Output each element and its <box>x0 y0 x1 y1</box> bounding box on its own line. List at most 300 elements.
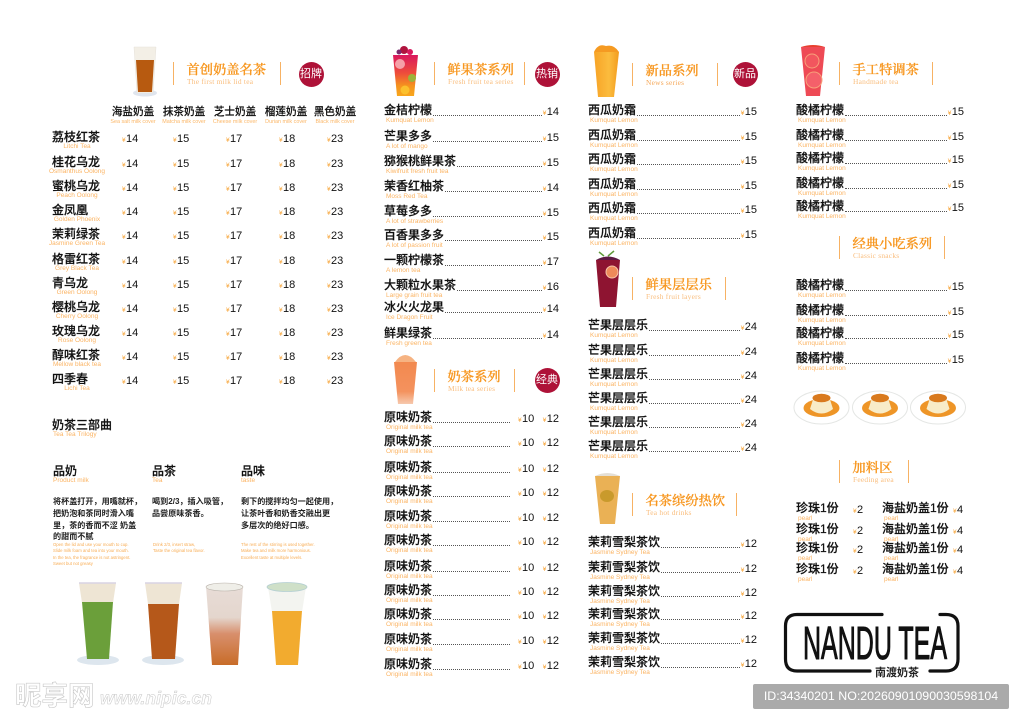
menu row 3: 西瓜奶霜: Kumquat Lemon <box>590 166 638 172</box>
menu row 11: 原味奶茶: ¥10 <box>518 660 534 672</box>
table row: 樱桃乌龙: ¥17 <box>226 302 242 314</box>
heading: first milk lid tea <box>173 62 281 85</box>
menu row 4: 酸橘柠檬: Kumquat Lemon <box>798 364 846 372</box>
table row: 醇味红茶: Mellow black tea <box>53 361 101 368</box>
menu row 5: 茉莉雪梨茶饮: ¥12 <box>741 634 757 646</box>
menu row 1: 原味奶茶: ¥10 <box>518 412 534 424</box>
menu row 2: 西瓜奶霜: 西瓜奶霜 <box>588 128 636 142</box>
table row: 桂花乌龙: Osmanthus Oolong <box>49 168 105 175</box>
menu row 4: 酸橘柠檬 <box>796 176 964 199</box>
menu row 1: 茉莉雪梨茶饮: Jasmine Sydney Tea <box>590 548 650 556</box>
menu row: 芒果多多: ¥15 <box>543 132 559 144</box>
text block: tea instructions: 品尝原味茶香。 <box>152 509 209 518</box>
menu row 10: 原味奶茶: Original milk tea <box>386 646 433 652</box>
menu row: 冰火火龙果: Ice Dragon Fruit <box>386 314 433 320</box>
menu row 1: 酸橘柠檬: 酸橘柠檬 <box>796 103 844 117</box>
table row: 四季春: ¥23 <box>327 374 343 386</box>
menu row 11: 原味奶茶: 原味奶茶 <box>384 657 432 671</box>
menu row 1: 芒果层层乐: 芒果层层乐 <box>588 318 648 332</box>
badge: classic <box>534 368 560 392</box>
table row: 醇味红茶: ¥23 <box>327 350 343 362</box>
heading: tea hot drinks: 名茶缤纷热饮 <box>646 492 725 508</box>
text block: tea english: Taste the original tea flavor. <box>153 548 205 553</box>
menu row 10: 原味奶茶: ¥10 <box>518 634 534 646</box>
menu row: 草莓多多: A lot of strawberries <box>386 218 443 224</box>
menu row 2: 原味奶茶: ¥12 <box>543 436 559 448</box>
menu row 2: 酸橘柠檬: 酸橘柠檬 <box>796 303 844 317</box>
menu row 5: 芒果层层乐: Kumquat Lemon <box>590 428 638 436</box>
menu row 2: 酸橘柠檬: Kumquat Lemon <box>798 316 846 324</box>
badge: new <box>732 62 758 86</box>
text block: tea english: Drink 2/3, insert straw, <box>153 542 195 547</box>
table row: 桂花乌龙 <box>49 155 343 175</box>
column header: durian <box>265 106 307 124</box>
menu row: 草莓多多: ¥15 <box>543 206 559 218</box>
topping row 3: pearl <box>798 554 812 562</box>
icon: black tea cup <box>142 582 184 665</box>
table row: 茉莉绿茶: ¥14 <box>122 230 138 242</box>
logo: NANDU TEA: 南渡奶茶 <box>875 665 919 679</box>
heading: fresh fruit layers <box>632 277 726 300</box>
heading: new series <box>632 63 718 86</box>
table row: 金凤凰: ¥14 <box>122 206 138 218</box>
heading: feeding area <box>839 460 909 483</box>
heading: fresh fruit tea <box>434 62 525 85</box>
table row: 青乌龙: ¥18 <box>279 278 295 290</box>
topping row 4: ¥4 <box>953 564 963 576</box>
heading: handmade tea <box>839 62 933 85</box>
menu row 5: 西瓜奶霜: ¥15 <box>741 204 757 216</box>
menu row: 大颗粒水果茶: Large grain fruit tea <box>386 292 442 298</box>
table row: 蜜桃乌龙: 蜜桃乌龙 <box>52 179 100 193</box>
table row: 茉莉绿茶: ¥15 <box>173 230 189 242</box>
topping row 2: 珍珠1份 <box>796 522 839 536</box>
menu row: 猕猴桃鲜果茶 <box>384 154 559 174</box>
menu row 9: 原味奶茶: ¥12 <box>543 610 559 622</box>
table row: 茉莉绿茶: ¥17 <box>226 230 242 242</box>
text block: milk instructions: 里，茶的香而不涩 奶盖 <box>53 521 136 530</box>
watermark: nipic: www.nipic.cn <box>100 688 212 708</box>
menu row: 大颗粒水果茶: 大颗粒水果茶 <box>384 278 456 292</box>
menu row 4: 西瓜奶霜 <box>588 177 757 200</box>
table row: 玫瑰乌龙 <box>52 324 343 344</box>
table row: 蜜桃乌龙: ¥17 <box>226 182 242 194</box>
menu row 2: 西瓜奶霜: Kumquat Lemon <box>590 142 638 148</box>
text block: milk english: In the tea, the fragrance is not astringent. <box>53 555 130 560</box>
table row: 樱桃乌龙: ¥18 <box>279 302 295 314</box>
menu row 6: 茉莉雪梨茶饮: 茉莉雪梨茶饮 <box>588 655 660 669</box>
menu row 5: 原味奶茶: ¥12 <box>543 512 559 524</box>
text block: taste english <box>241 542 315 560</box>
logo: NANDU TEA <box>780 608 964 680</box>
topping row 1: 珍珠1份 <box>796 501 839 515</box>
icon: orange milk tea cup <box>392 351 420 405</box>
text block: milk english <box>53 542 130 566</box>
menu row 7: 原味奶茶: ¥10 <box>518 562 534 574</box>
menu row 6: 西瓜奶霜: 西瓜奶霜 <box>588 226 636 240</box>
menu row 5: 芒果层层乐: 芒果层层乐 <box>588 415 648 429</box>
menu row: 冰火火龙果: ¥14 <box>543 302 559 314</box>
menu row 7: 原味奶茶: Original milk tea <box>386 572 433 580</box>
menu row 2: 原味奶茶: ¥10 <box>518 436 534 448</box>
table row: 荔枝红茶 <box>52 130 343 150</box>
heading: trilogy: Tea Tea Trilogy <box>53 431 97 438</box>
heading: fresh fruit layers: 鲜果层层乐 <box>646 276 712 292</box>
menu row 3: 原味奶茶: 原味奶茶 <box>384 460 432 474</box>
menu row 1: 西瓜奶霜: Kumquat Lemon <box>590 116 638 124</box>
menu row 2: 原味奶茶: Original milk tea <box>386 448 433 454</box>
topping row 4: pearl <box>798 576 812 582</box>
icon: hot tea cup <box>593 471 622 526</box>
id bar <box>753 684 1009 709</box>
menu row 7: 原味奶茶 <box>384 559 559 582</box>
menu row 4: 茉莉雪梨茶饮 <box>588 607 757 630</box>
table row: 玫瑰乌龙: 玫瑰乌龙 <box>52 324 100 338</box>
menu row 5: 西瓜奶霜: 西瓜奶霜 <box>588 201 636 215</box>
heading: fresh fruit tea: 鲜果茶系列 <box>448 62 514 76</box>
table row: 玫瑰乌龙: ¥18 <box>279 326 295 338</box>
table row: 桂花乌龙: ¥18 <box>279 158 295 170</box>
menu row 6: 茉莉雪梨茶饮: Jasmine Sydney Tea <box>590 668 650 676</box>
heading: tea hot drinks <box>632 493 737 516</box>
menu row 2: 茉莉雪梨茶饮: ¥12 <box>741 562 757 574</box>
step heading: product milk <box>53 464 89 484</box>
menu row 9: 原味奶茶: Original milk tea <box>386 620 433 628</box>
heading: first milk lid tea: The first milk lid tea <box>187 77 253 86</box>
menu row 1: 酸橘柠檬 <box>796 103 964 126</box>
menu row 3: 酸橘柠檬: ¥15 <box>948 328 964 340</box>
menu row 3: 酸橘柠檬: ¥15 <box>948 154 964 166</box>
table row: 格雷红茶: ¥15 <box>173 254 189 266</box>
column header: matcha: Matcha milk cover <box>162 118 206 124</box>
menu row 6: 芒果层层乐: ¥24 <box>741 442 757 454</box>
table row: 格雷红茶: ¥14 <box>122 254 138 266</box>
table row: 蜜桃乌龙: ¥23 <box>327 182 343 194</box>
text block: milk instructions <box>53 497 142 541</box>
table row: 醇味红茶 <box>52 348 343 368</box>
menu row 9: 原味奶茶: ¥10 <box>518 610 534 622</box>
badge: signature: 招牌 <box>300 68 322 80</box>
topping row 1: pearl <box>798 514 812 522</box>
heading: trilogy: 奶茶三部曲 <box>52 418 112 432</box>
table row: 青乌龙 <box>52 276 343 296</box>
heading: classic snacks: 经典小吃系列 <box>852 236 932 250</box>
menu row 3: 西瓜奶霜: 西瓜奶霜 <box>588 152 636 166</box>
menu row: 猕猴桃鲜果茶: ¥15 <box>543 156 559 168</box>
menu row: 猕猴桃鲜果茶: 猕猴桃鲜果茶 <box>384 154 456 168</box>
table row: 茉莉绿茶: ¥18 <box>279 230 295 242</box>
menu row 4: 西瓜奶霜: Kumquat Lemon <box>590 190 638 198</box>
menu row 2: 芒果层层乐: 芒果层层乐 <box>588 343 648 357</box>
text block: milk english: Sweet but not greasy <box>53 561 93 566</box>
menu row 4: 原味奶茶: ¥10 <box>518 486 534 498</box>
table row: 荔枝红茶: Litchi Tea <box>63 143 91 150</box>
menu row: 芒果多多: A lot of mango <box>386 142 428 150</box>
heading: feeding area: Feeding area <box>853 475 894 484</box>
text block: taste instructions <box>241 497 338 530</box>
menu row 3: 酸橘柠檬: 酸橘柠檬 <box>796 151 844 165</box>
menu row 4: 芒果层层乐: Kumquat Lemon <box>590 404 638 412</box>
menu row: 金桔柠檬: Kumquat Lemon <box>386 116 434 124</box>
menu row 11: 原味奶茶 <box>384 657 559 680</box>
menu row 1: 原味奶茶: 原味奶茶 <box>384 410 432 424</box>
menu row 1: 酸橘柠檬: 酸橘柠檬 <box>796 278 844 292</box>
heading: new series: News series <box>646 78 684 87</box>
menu row: 草莓多多: 草莓多多 <box>384 204 432 218</box>
table row: 格雷红茶: ¥17 <box>226 254 242 266</box>
column header: matcha: 抹茶奶盖 <box>163 106 205 118</box>
menu row 5: 西瓜奶霜 <box>588 201 757 224</box>
menu row 5: 酸橘柠檬: Kumquat Lemon <box>798 212 846 220</box>
menu row 6: 原味奶茶: 原味奶茶 <box>384 533 432 547</box>
table row: 荔枝红茶: ¥23 <box>327 132 343 144</box>
column header: durian: Durian milk cover <box>265 118 307 124</box>
table row: 格雷红茶: 格雷红茶 <box>52 252 100 266</box>
table row: 金凤凰: ¥18 <box>279 206 295 218</box>
menu row: 茉香红柚茶: ¥14 <box>543 182 559 194</box>
heading: milk tea series: 奶茶系列 <box>448 368 501 384</box>
text block: milk instructions: 的甜而不腻 <box>53 532 93 541</box>
menu row 6: 芒果层层乐: 芒果层层乐 <box>588 439 648 453</box>
menu row 3: 芒果层层乐: ¥24 <box>741 370 757 382</box>
menu row 1: 茉莉雪梨茶饮: 茉莉雪梨茶饮 <box>588 535 660 549</box>
menu row 4: 芒果层层乐: ¥24 <box>741 394 757 406</box>
menu row 11: 原味奶茶: ¥12 <box>543 660 559 672</box>
column header: sea salt: Sea salt milk cover <box>110 118 156 124</box>
table row: 格雷红茶 <box>52 252 343 272</box>
table row: 格雷红茶: Grey Black Tea <box>55 265 99 272</box>
panel: tea hot drinks <box>585 470 765 680</box>
menu row 5: 茉莉雪梨茶饮: Jasmine Sydney Tea <box>590 644 650 652</box>
menu row 1: 芒果层层乐: Kumquat Lemon <box>590 332 638 338</box>
menu row 5: 茉莉雪梨茶饮 <box>588 631 757 654</box>
topping row 2: pearl <box>798 536 812 542</box>
topping row 3: 海盐奶盖1份 <box>882 541 949 555</box>
table row: 樱桃乌龙 <box>52 300 343 320</box>
table row: 醇味红茶: 醇味红茶 <box>52 348 100 362</box>
menu row 11: 原味奶茶: Original milk tea <box>386 670 433 678</box>
menu row 2: 酸橘柠檬: ¥15 <box>948 130 964 142</box>
table row: 醇味红茶: ¥18 <box>279 350 295 362</box>
menu row 4: 西瓜奶霜: 西瓜奶霜 <box>588 177 636 191</box>
menu row 4: 原味奶茶: ¥12 <box>543 486 559 498</box>
menu row 5: 原味奶茶 <box>384 509 559 532</box>
panel: fresh fruit tea <box>384 46 560 346</box>
table row: 桂花乌龙: ¥15 <box>173 158 189 170</box>
menu row: 一颗柠檬茶: 一颗柠檬茶 <box>384 253 444 267</box>
text block: taste instructions: 让茶叶香和奶香交融出更 <box>241 509 330 518</box>
menu row 2: 原味奶茶: 原味奶茶 <box>384 434 432 448</box>
icon: mango cup <box>592 44 621 98</box>
menu row 4: 酸橘柠檬 <box>796 351 964 374</box>
menu row: 冰火火龙果 <box>384 300 559 323</box>
menu row 7: 原味奶茶: 原味奶茶 <box>384 559 432 573</box>
menu row 2: 原味奶茶 <box>384 434 559 457</box>
panel: fresh fruit layers <box>585 248 765 460</box>
menu row 2: 酸橘柠檬: Kumquat Lemon <box>798 142 846 148</box>
table row: 四季春: 四季春 <box>52 372 88 386</box>
menu row: 芒果多多: 芒果多多 <box>384 129 432 143</box>
menu row 3: 西瓜奶霜 <box>588 152 757 175</box>
heading: milk tea series: Milk tea series <box>448 384 495 393</box>
table row: 金凤凰: 金凤凰 <box>52 203 88 217</box>
topping row 1 <box>796 501 966 524</box>
table row: 青乌龙: ¥14 <box>122 278 138 290</box>
icon: mango cheese cup <box>266 582 308 665</box>
menu row 1: 酸橘柠檬 <box>796 278 964 301</box>
id bar: ID:34340201 NO:20260901090030598104 <box>764 689 998 703</box>
menu row 2: 茉莉雪梨茶饮 <box>588 560 757 583</box>
menu row 3: 原味奶茶: ¥12 <box>543 462 559 474</box>
table row: 金凤凰 <box>52 203 343 223</box>
table row: 茉莉绿茶: Jasmine Green Tea <box>49 240 105 247</box>
menu row 6: 芒果层层乐: Kumquat Lemon <box>590 452 638 460</box>
menu row 3: 芒果层层乐: 芒果层层乐 <box>588 367 648 381</box>
table row: 四季春: ¥14 <box>122 374 138 386</box>
panel: new series <box>585 40 765 248</box>
topping row 3: ¥2 <box>853 544 863 556</box>
table row: 四季春: ¥15 <box>173 374 189 386</box>
panel: handmade tea <box>790 40 970 220</box>
heading: tea hot drinks: Tea hot drinks <box>646 508 692 517</box>
step heading: product milk: Product milk <box>53 477 89 484</box>
menu row 4: 酸橘柠檬: Kumquat Lemon <box>798 190 846 196</box>
table row: 樱桃乌龙: ¥15 <box>173 302 189 314</box>
table row: 青乌龙: ¥17 <box>226 278 242 290</box>
menu row 4: 酸橘柠檬: ¥15 <box>948 354 964 366</box>
text block: taste english: Make tea and milk more harmonious. <box>241 548 311 553</box>
menu row 5: 原味奶茶: 原味奶茶 <box>384 509 432 523</box>
table row: 金凤凰: Golden Phoenix <box>54 216 100 223</box>
table row: 青乌龙: 青乌龙 <box>52 276 88 290</box>
column header: black <box>314 106 356 124</box>
menu row: 金桔柠檬 <box>384 103 559 124</box>
table row: 荔枝红茶: 荔枝红茶 <box>52 130 100 144</box>
topping row 1: ¥2 <box>853 504 863 516</box>
table row: 青乌龙: Green Oolong <box>57 289 97 296</box>
topping row 4: pearl <box>884 576 898 582</box>
column header: black: Black milk cover <box>316 118 354 124</box>
icon: red fruit cup <box>799 44 827 98</box>
menu row 2: 茉莉雪梨茶饮: Jasmine Sydney Tea <box>590 574 650 580</box>
badge: hot: 热销 <box>536 68 558 80</box>
table row: 荔枝红茶: ¥14 <box>122 132 138 144</box>
table row: 玫瑰乌龙: Rose Oolong <box>58 337 96 344</box>
menu row 5: 茉莉雪梨茶饮: 茉莉雪梨茶饮 <box>588 631 660 645</box>
menu row 4: 酸橘柠檬: 酸橘柠檬 <box>796 176 844 190</box>
column header: cheese: Cheese milk cover <box>213 118 257 124</box>
heading: new series: 新品系列 <box>646 62 699 78</box>
menu row 3: 酸橘柠檬: Kumquat Lemon <box>798 164 846 172</box>
topping row 3: pearl <box>884 554 898 562</box>
menu row 1: 芒果层层乐 <box>588 318 757 341</box>
icon: three caramel puddings <box>792 388 970 428</box>
menu row: 大颗粒水果茶 <box>384 278 559 301</box>
table row: 桂花乌龙: ¥23 <box>327 158 343 170</box>
menu row: 一颗柠檬茶: ¥17 <box>543 256 559 268</box>
menu row 3: 酸橘柠檬 <box>796 326 964 349</box>
step heading: product milk: 品奶 <box>53 464 77 478</box>
table row: 桂花乌龙: 桂花乌龙 <box>52 155 100 169</box>
menu row 3: 酸橘柠檬: Kumquat Lemon <box>798 340 846 346</box>
column header: durian: 榴莲奶盖 <box>265 106 307 118</box>
watermark: nipic <box>10 682 220 712</box>
text block: milk instructions: 将杯盖打开，用嘴就杯， <box>53 497 142 506</box>
table row: 四季春: ¥17 <box>226 374 242 386</box>
menu row 5: 原味奶茶: Original milk tea <box>386 522 433 530</box>
menu row: 大颗粒水果茶: ¥16 <box>543 280 559 292</box>
table row: 樱桃乌龙: ¥23 <box>327 302 343 314</box>
table row: 青乌龙: ¥23 <box>327 278 343 290</box>
menu row 5: 原味奶茶: ¥10 <box>518 512 534 524</box>
table row: 金凤凰: ¥15 <box>173 206 189 218</box>
menu row 2: 酸橘柠檬: 酸橘柠檬 <box>796 128 844 142</box>
menu row 2: 酸橘柠檬 <box>796 303 964 326</box>
topping row 3: ¥4 <box>953 544 963 556</box>
menu row 2: 芒果层层乐: ¥24 <box>741 346 757 358</box>
menu row 1: 原味奶茶: ¥12 <box>543 412 559 424</box>
text block: taste english: The rest of the stirring is used together. <box>241 542 315 547</box>
table row: 茉莉绿茶 <box>49 227 343 247</box>
heading: fresh fruit tea: Fresh fruit tea series <box>448 77 514 86</box>
icon: fresh fruit tea cup <box>393 46 418 96</box>
heading: handmade tea: Handmade tea <box>853 77 898 86</box>
menu row: 鲜果绿茶: ¥14 <box>543 328 559 340</box>
icon: red layered cup <box>594 249 622 309</box>
heading: classic snacks <box>839 236 945 259</box>
menu row 6: 原味奶茶 <box>384 533 559 556</box>
column header: sea salt <box>110 106 156 124</box>
menu row 8: 原味奶茶: Original milk tea <box>386 596 433 604</box>
menu row 1: 西瓜奶霜 <box>588 103 757 126</box>
menu row 1: 原味奶茶: Original milk tea <box>386 424 433 430</box>
heading: handmade tea: 手工特调茶 <box>852 62 919 76</box>
menu row: 金桔柠檬: 金桔柠檬 <box>384 103 432 117</box>
menu row 1: 酸橘柠檬: ¥15 <box>948 280 964 292</box>
table row: 荔枝红茶: ¥15 <box>173 132 189 144</box>
menu row 6: 茉莉雪梨茶饮 <box>588 655 757 678</box>
menu row 4: 酸橘柠檬: 酸橘柠檬 <box>796 351 844 365</box>
menu row: 鲜果绿茶 <box>384 326 559 349</box>
menu row 3: 酸橘柠檬 <box>796 151 964 174</box>
menu row: 草莓多多 <box>384 204 559 224</box>
menu row 1: 茉莉雪梨茶饮: ¥12 <box>741 538 757 550</box>
text block: milk instructions: 把奶泡和茶同时滑入嘴 <box>53 509 134 518</box>
table row: 金凤凰: ¥17 <box>226 206 242 218</box>
topping row 4: 海盐奶盖1份 <box>882 562 949 576</box>
table row: 蜜桃乌龙: ¥18 <box>279 182 295 194</box>
step heading: tea: Tea <box>152 477 162 484</box>
menu row 9: 原味奶茶 <box>384 607 559 630</box>
column header: cheese: 芝士奶盖 <box>214 106 256 118</box>
menu row 3: 原味奶茶: ¥10 <box>518 462 534 474</box>
topping row 3 <box>796 541 966 564</box>
topping row 1: pearl <box>884 514 898 522</box>
menu row 8: 原味奶茶: ¥12 <box>543 586 559 598</box>
menu row: 鲜果绿茶: Fresh green tea <box>386 340 432 346</box>
menu row: 百香果多多: ¥15 <box>543 230 559 242</box>
menu row 1: 酸橘柠檬: Kumquat Lemon <box>798 292 846 298</box>
menu row 3: 酸橘柠檬: 酸橘柠檬 <box>796 326 844 340</box>
heading: first milk lid tea: 首创奶盖名茶 <box>186 62 266 76</box>
heading: feeding area: 加料区 <box>852 460 892 474</box>
menu row 1: 芒果层层乐: ¥24 <box>741 320 757 332</box>
menu row 1: 酸橘柠檬: Kumquat Lemon <box>798 116 846 124</box>
table row: 格雷红茶: ¥23 <box>327 254 343 266</box>
table row: 茉莉绿茶: ¥23 <box>327 230 343 242</box>
menu row 5: 酸橘柠檬: ¥15 <box>948 202 964 214</box>
text block: taste english: Excellent taste at multiple levels. <box>241 555 302 560</box>
